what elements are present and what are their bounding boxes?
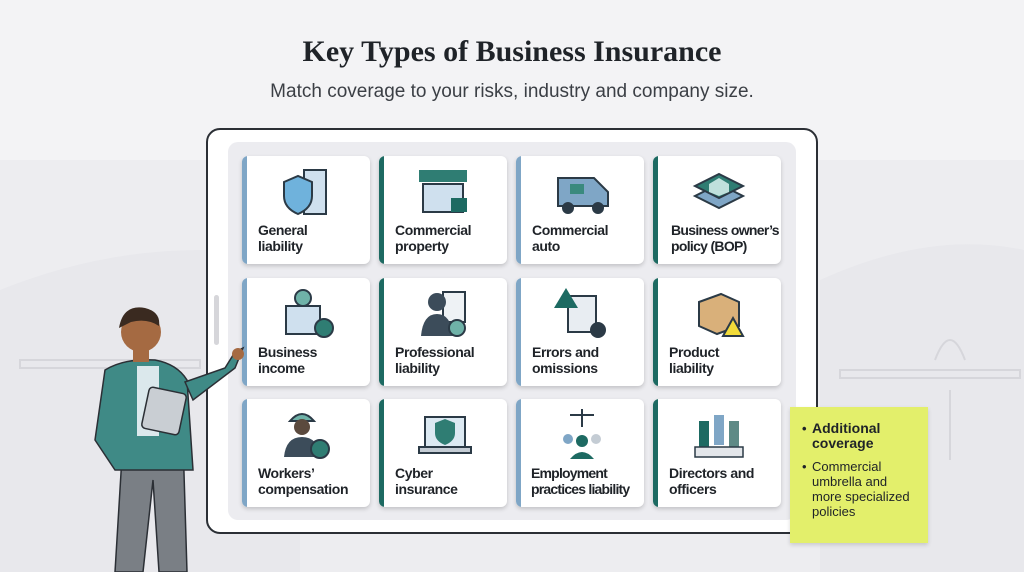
card: Cyber insurance [379, 399, 507, 507]
card: Commercial property [379, 156, 507, 264]
card: Professional liability [379, 278, 507, 386]
title: Key Types of Business Insurance [303, 35, 721, 68]
card: Business income [242, 278, 370, 386]
card: Product liability [653, 278, 781, 386]
card: BOP: Business owner’s [671, 222, 779, 238]
card: Commercial auto: Commercial [532, 222, 608, 238]
card: Workers' compensation: Workers’ [258, 465, 314, 481]
sticky note: additional coverage: more specialized [812, 489, 910, 504]
card: Commercial property: Commercial [395, 222, 471, 238]
card: Commercial auto: auto [532, 238, 560, 254]
sticky note: additional coverage: Commercial [812, 459, 881, 474]
sticky note: additional coverage [790, 407, 928, 543]
card: Commercial auto [516, 156, 644, 264]
card: BOP [653, 156, 781, 264]
card: General liability: liability [258, 238, 303, 254]
card: Business income: income [258, 360, 305, 376]
card: Cyber insurance: insurance [395, 481, 458, 497]
card: Professional liability: Professional [395, 344, 474, 360]
card: Business income: Business [258, 344, 317, 360]
card: Product liability: Product [669, 344, 719, 360]
card: BOP: policy (BOP) [671, 238, 747, 254]
card: Employment practices liability: Employment [531, 465, 607, 481]
person presenter [94, 307, 244, 572]
card: Directors and officers: Directors and [669, 465, 754, 481]
card: Professional liability: liability [395, 360, 440, 376]
card: Employment practices liability: practices liability [531, 481, 629, 497]
tablet frame [206, 128, 818, 534]
sticky note: additional coverage: Additional [812, 420, 880, 436]
card: General liability: General [258, 222, 307, 238]
card: Employment practices liability [516, 399, 644, 507]
card: Cyber insurance: Cyber [395, 465, 433, 481]
card: General liability [242, 156, 370, 264]
card: Workers' compensation [242, 399, 370, 507]
card: Errors and omissions [516, 278, 644, 386]
card: Workers' compensation: compensation [258, 481, 348, 497]
card: Directors and officers [653, 399, 781, 507]
sticky note: additional coverage: • [802, 421, 807, 436]
sticky note: additional coverage: policies [812, 504, 855, 519]
sticky note: additional coverage: • [802, 459, 807, 474]
card: Commercial property: property [395, 238, 449, 254]
sticky note: additional coverage: umbrella and [812, 474, 887, 489]
card: Directors and officers: officers [669, 481, 716, 497]
card: Errors and omissions: Errors and [532, 344, 599, 360]
card: Product liability: liability [669, 360, 714, 376]
sticky note: additional coverage: coverage [812, 435, 873, 451]
card: Errors and omissions: omissions [532, 360, 598, 376]
subtitle: Match coverage to your risks, industry and company size. [270, 81, 754, 102]
